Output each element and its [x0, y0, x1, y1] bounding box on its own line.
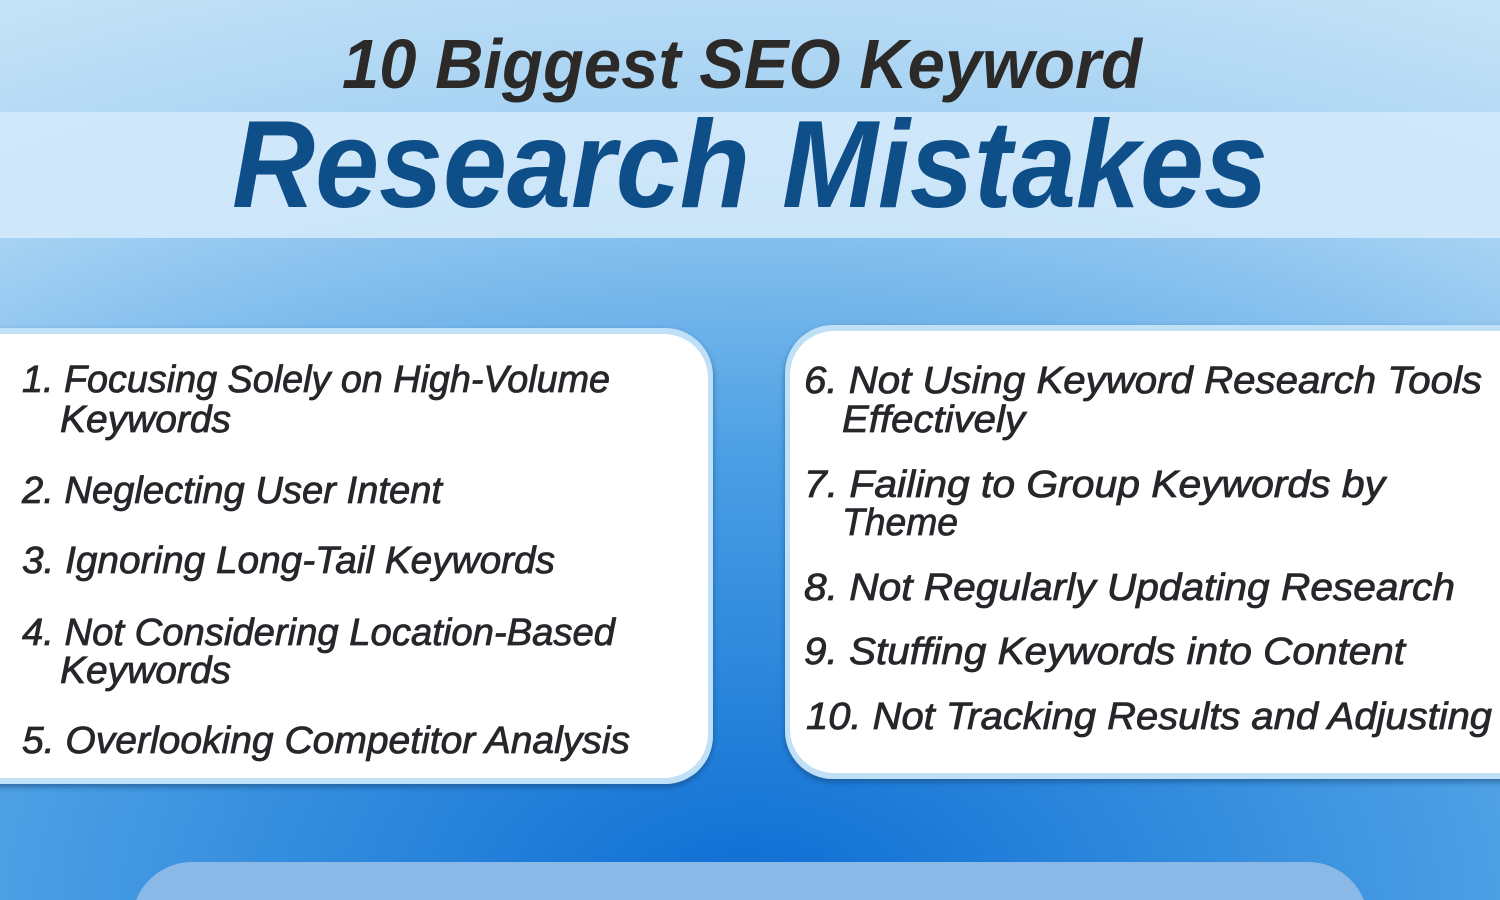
item 2: 2. Neglecting User Intent — [21, 470, 443, 512]
title: Research Mistakes — [232, 96, 1268, 234]
item 9: 9. Stuffing Keywords into Content — [804, 631, 1407, 673]
item 4: 4. Not Considering Location-Based — [22, 612, 617, 654]
item 5: 5. Overlooking Competitor Analysis — [22, 720, 630, 762]
item 6: 6. Not Using Keyword Research Tools — [804, 360, 1482, 402]
panel: mistakes 1-5 — [0, 328, 713, 784]
item 7: Theme — [842, 502, 958, 544]
title band — [0, 112, 1500, 238]
item 6: Effectively — [842, 399, 1027, 441]
title: 10 Biggest SEO Keyword — [342, 25, 1143, 103]
item 7: 7. Failing to Group Keywords by — [804, 464, 1387, 506]
item 1: 1. Focusing Solely on High-Volume — [22, 359, 610, 401]
item 8: 8. Not Regularly Updating Research — [804, 567, 1455, 609]
title — [232, 25, 1268, 234]
item 7 — [804, 464, 1387, 544]
item 6 — [804, 360, 1482, 441]
panel: mistakes 6-10 — [785, 325, 1500, 779]
item 3: 3. Ignoring Long-Tail Keywords — [22, 540, 555, 582]
item 10: 10. Not Tracking Results and Adjusting — [806, 696, 1492, 738]
item 1 — [22, 359, 610, 441]
item 4 — [22, 612, 617, 692]
bottom panel — [132, 862, 1368, 900]
item 4: Keywords — [60, 650, 231, 692]
item 1: Keywords — [60, 399, 231, 441]
